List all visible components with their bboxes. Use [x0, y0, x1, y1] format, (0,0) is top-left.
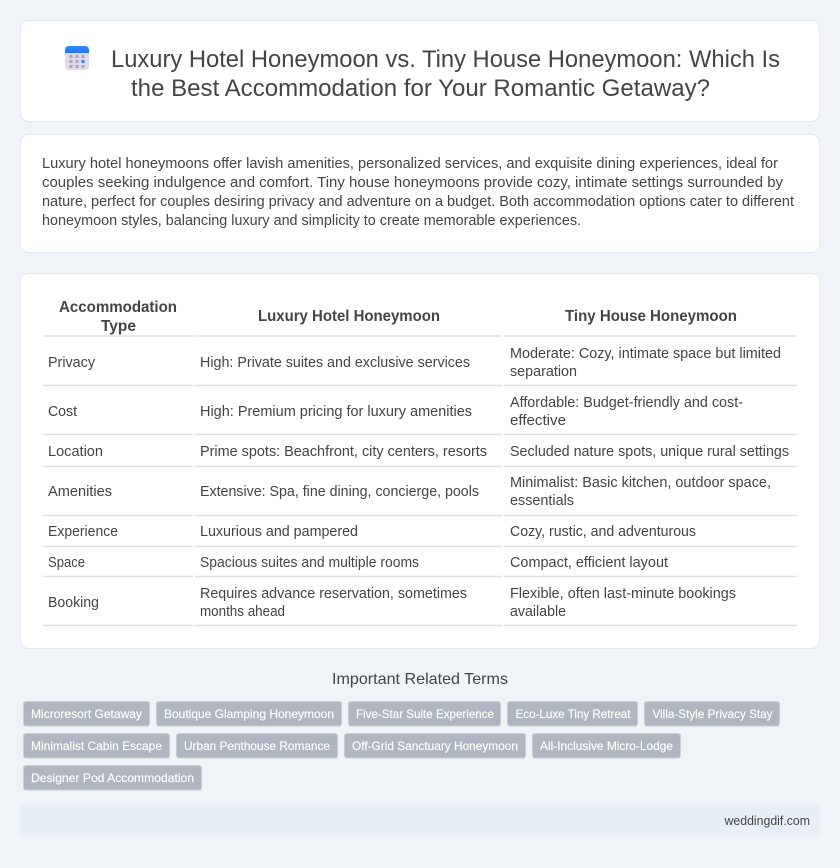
related term chips: Five-Star Suite Experience: [356, 707, 494, 721]
table header: [59, 299, 737, 335]
row: location: Prime spots: Beachfront, city centers, resorts: [200, 444, 487, 460]
related term chips: Microresort Getaway: [31, 707, 142, 721]
row: booking: Requires advance reservation, sometimes: [200, 586, 467, 602]
table header: Accommodation: [59, 299, 177, 316]
row: amenities: [48, 475, 771, 509]
related term chips: Boutique Glamping Honeymoon: [164, 707, 334, 721]
footer: [20, 804, 820, 838]
related term chips: Designer Pod Accommodation: [31, 771, 194, 785]
row: cost: [48, 395, 743, 429]
row: experience: Luxurious and pampered: [200, 524, 358, 540]
related term chips: Eco-Luxe Tiny Retreat: [516, 707, 631, 721]
row: experience: Cozy, rustic, and adventurous: [510, 524, 696, 540]
table header: Tiny House Honeymoon: [565, 308, 737, 325]
row: cost: effective: [510, 413, 566, 429]
related term chips: Villa-Style Privacy Stay: [652, 707, 772, 721]
row: booking: Booking: [48, 595, 99, 611]
row: space: Compact, efficient layout: [510, 555, 668, 571]
table header: Type: [101, 318, 136, 335]
row: location: Secluded nature spots, unique rural settings: [510, 444, 789, 460]
row: experience: Experience: [48, 524, 118, 540]
table header: Luxury Hotel Honeymoon: [258, 308, 440, 325]
row: booking: months ahead: [200, 604, 285, 620]
row: location: Location: [48, 444, 103, 460]
row: booking: [48, 586, 736, 620]
row: space: [48, 555, 668, 571]
title: [111, 46, 780, 102]
footer: weddingdif.com: [724, 814, 810, 828]
panel: intro text: honeymoon styles, balancing luxury and simplicity to create memorable experiences.: [42, 213, 581, 229]
row: location: [48, 444, 789, 460]
title: Luxury Hotel Honeymoon vs. Tiny House Honeymoon: Which Is: [111, 46, 780, 73]
row: amenities: essentials: [510, 493, 574, 509]
related term chips: Urban Penthouse Romance: [184, 739, 330, 753]
row: cost: Affordable: Budget-friendly and cost-: [510, 395, 743, 411]
row: space: Space: [48, 555, 85, 571]
related term chips: [24, 702, 780, 790]
icon: calendar: [65, 46, 89, 70]
row: privacy: separation: [510, 364, 577, 380]
panel: comparison table: [20, 274, 820, 648]
row: experience: [48, 524, 696, 540]
panel: intro text: nature, perfect for couples desiring privacy and adventure on a budget. Both accommodation options cater to different: [42, 194, 794, 210]
panel: title header: [20, 20, 820, 122]
panel: intro text: couples seeking indulgence and comfort. Tiny house honeymoons provide cozy, intimate settings surrounded by: [42, 175, 784, 191]
row: booking: available: [510, 604, 566, 620]
row: cost: Cost: [48, 404, 77, 420]
row: booking: Flexible, often last-minute bookings: [510, 586, 736, 602]
row: amenities: Amenities: [48, 484, 112, 500]
panel: intro text: Luxury hotel honeymoons offer lavish amenities, personalized services, and exquisite dining experiences, ideal for: [42, 156, 778, 172]
related term chips: All-Inclusive Micro-Lodge: [540, 739, 673, 753]
row: amenities: Extensive: Spa, fine dining, concierge, pools: [200, 484, 479, 500]
row: privacy: Moderate: Cozy, intimate space but limited: [510, 346, 781, 362]
panel: intro text: [20, 134, 820, 252]
related term chips: Minimalist Cabin Escape: [31, 739, 162, 753]
row: amenities: Minimalist: Basic kitchen, outdoor space,: [510, 475, 771, 491]
heading: related terms: Important Related Terms: [332, 671, 508, 688]
title: the Best Accommodation for Your Romantic Getaway?: [131, 75, 710, 102]
row: space: Spacious suites and multiple rooms: [200, 555, 419, 571]
row: privacy: [48, 346, 781, 380]
row: privacy: Privacy: [48, 355, 96, 371]
row: cost: High: Premium pricing for luxury amenities: [200, 404, 472, 420]
related term chips: Off-Grid Sanctuary Honeymoon: [352, 739, 518, 753]
row: privacy: High: Private suites and exclusive services: [200, 355, 470, 371]
